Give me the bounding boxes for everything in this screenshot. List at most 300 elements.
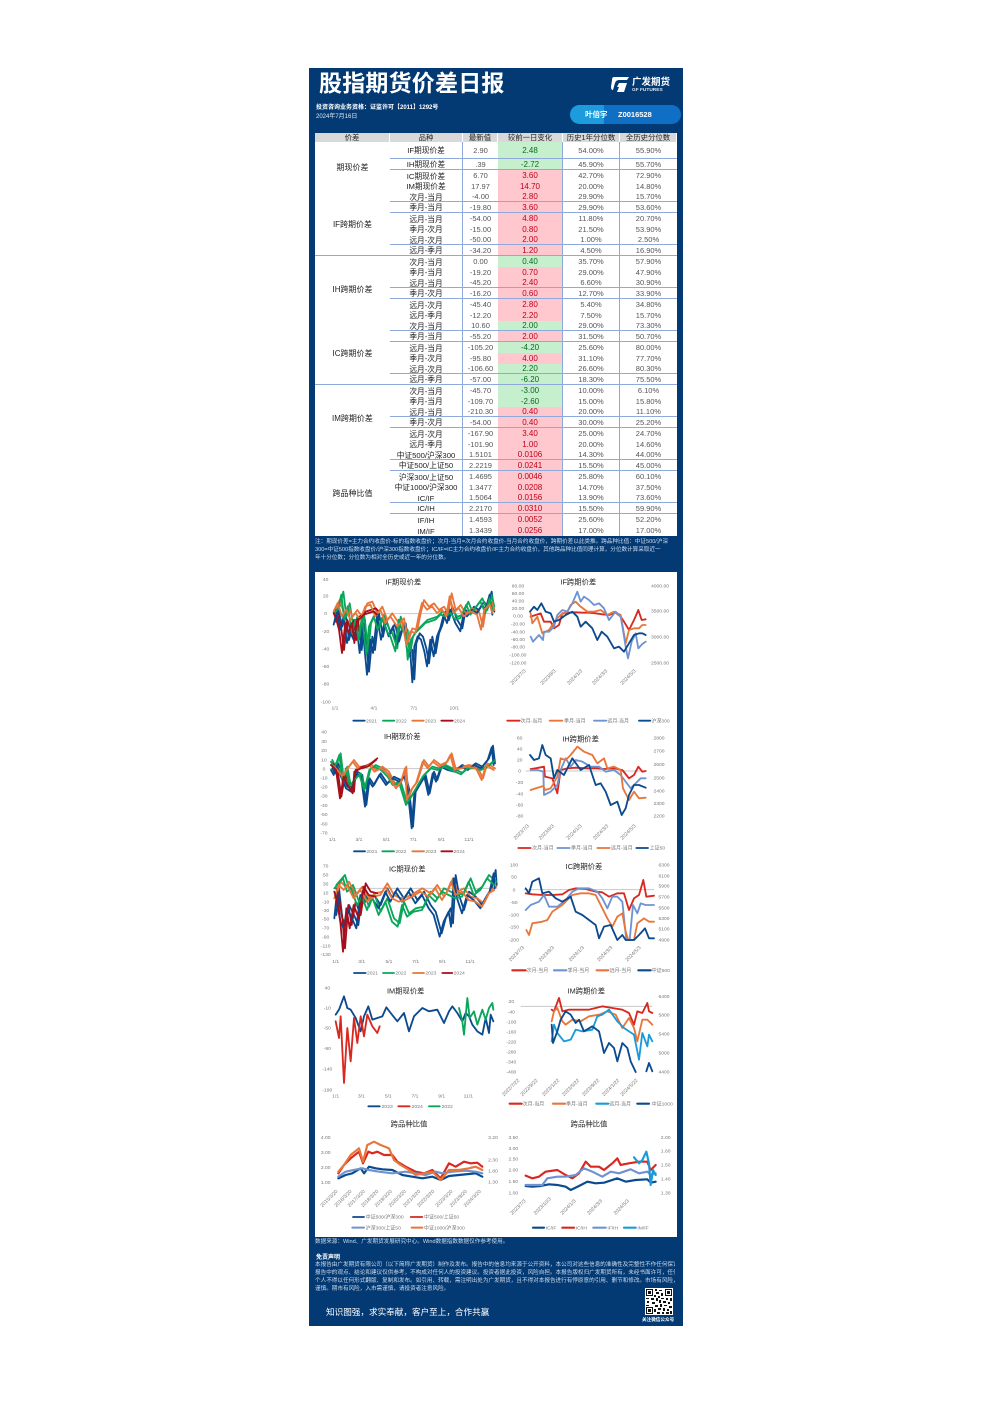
- chart: IH basis spread: IH期现价差: [384, 732, 421, 741]
- chart: index ratio: 跨品种比值: [391, 1120, 428, 1129]
- chart: IH calendar spread: 20: [517, 757, 523, 763]
- panel: spread data table: -55.20: [470, 332, 491, 341]
- chart: IH basis spread: 2024: [454, 849, 465, 855]
- chart: IM calendar spread: 次月-当月: [523, 1100, 544, 1107]
- chart: contract ratio: IM/IF: [637, 1225, 649, 1231]
- chart: index ratio: 3.00: [321, 1150, 331, 1156]
- chart: contract ratio: 1.40: [661, 1176, 671, 1182]
- chart: IH calendar spread: 2024/5/3: [620, 823, 638, 841]
- chart: index ratio: 2016/3/20: [334, 1189, 354, 1209]
- panel: spread data table: 2.90: [473, 146, 488, 155]
- chart: IH basis spread: -70: [320, 830, 328, 836]
- panel: spread data table: 16.90%: [636, 246, 661, 255]
- chart: IM basis spread: -90: [324, 1046, 331, 1052]
- panel: spread data table: IC跨期价差: [332, 349, 372, 358]
- chart: IC calendar spread: -50: [510, 900, 518, 906]
- chart: IM calendar spread: -160: [506, 1030, 517, 1036]
- panel: spread data table: 2.00: [522, 332, 538, 341]
- panel: spread data table: 33.90%: [636, 289, 661, 298]
- chart: index ratio: 中证500/沪深300: [366, 1214, 404, 1221]
- panel: spread data table: 0.0256: [518, 526, 542, 535]
- chart: IH calendar spread: 2024/3/3: [592, 823, 610, 841]
- panel: spread data table: 55.90%: [636, 146, 661, 155]
- chart: index ratio: 2.00: [321, 1165, 331, 1171]
- chart: contract ratio: IF/IH: [607, 1225, 619, 1231]
- panel: spread data table: 12.70%: [578, 289, 604, 298]
- panel: spread data table: 14.80%: [636, 182, 661, 191]
- panel: spread data table: .39: [475, 160, 486, 169]
- chart: IC basis spread: IC期现价差: [389, 864, 426, 873]
- chart: IH calendar spread: 次月-当月: [532, 845, 554, 852]
- chart: IC calendar spread: 5100: [658, 927, 670, 933]
- panel: spread data table: 44.00%: [636, 450, 661, 459]
- chart: IH calendar spread: 0: [518, 769, 521, 775]
- chart: IC calendar spread: 中证500: [652, 967, 670, 974]
- panel: spread data table: 次月-当月: [409, 322, 443, 331]
- panel: spread data table: 0.40: [522, 407, 538, 416]
- panel: spread data table: 37.50%: [636, 483, 661, 492]
- chart: index ratio: 1.30: [488, 1180, 498, 1186]
- panel: spread data table: 2.20: [522, 364, 538, 373]
- chart: IC basis spread: 1/1: [332, 959, 339, 965]
- chart: IM calendar spread: -40: [508, 1009, 515, 1015]
- panel: spread data table: 14.70%: [578, 483, 604, 492]
- chart: index ratio: 2023/9/20: [449, 1189, 469, 1209]
- panel: spread data table: 5.40%: [580, 300, 602, 309]
- chart: IC basis spread: 2024: [454, 971, 465, 977]
- panel: spread data table: 15.50%: [578, 461, 604, 470]
- chart: index ratio: 1.80: [488, 1169, 498, 1175]
- panel: spread data table: 0.0208: [518, 483, 542, 492]
- chart: IH basis spread: -10: [320, 775, 328, 781]
- panel: spread data table: 较前一日变化: [508, 133, 552, 142]
- chart: IM calendar spread: 5800: [658, 1012, 670, 1018]
- panel: spread data table: 21.50%: [578, 225, 604, 234]
- panel: spread data table: 远月-季月: [409, 375, 443, 384]
- icon: QR code: [645, 1288, 673, 1315]
- panel: spread data table: 11.80%: [579, 214, 603, 223]
- panel: spread data table: 17.00%: [578, 526, 604, 535]
- chart: IM calendar spread: 2024/1/22: [601, 1078, 621, 1098]
- chart: IC calendar spread: 远月-当月: [610, 967, 631, 974]
- panel: spread data table: 远月-次月: [409, 301, 443, 310]
- chart: contract ratio: 2.50: [508, 1157, 518, 1163]
- chart: IM basis spread: -50: [324, 1026, 331, 1032]
- panel: spread data table: 2.80: [522, 192, 538, 201]
- chart: IC calendar spread: 2023/7/3: [508, 945, 526, 963]
- chart: IM calendar spread: -280: [506, 1050, 517, 1056]
- panel: spread data table: 远月-次月: [409, 236, 443, 245]
- chart: IC calendar spread: 50: [511, 874, 517, 880]
- slogan: 知识图强，求实奉献，客户至上，合作共赢: [326, 1307, 489, 1317]
- panel: spread data table: -101.90: [468, 440, 493, 449]
- chart: IH calendar spread: 2600: [653, 762, 665, 768]
- report page background: [309, 68, 683, 1326]
- panel: spread data table: 2.40: [522, 278, 538, 287]
- title: 股指期货价差日报: [319, 70, 505, 96]
- panel: spread data table: 4.80: [522, 214, 538, 223]
- chart: IM basis spread: 7/1: [412, 1093, 419, 1099]
- panel: spread data table: 53.90%: [636, 225, 661, 234]
- panel: spread data table: 远月-当月: [409, 279, 443, 288]
- table footnote: 300=中证500指数收盘价/沪深300指数收盘价；IC/IF=IC主力合约收盘价/IF主力合约收盘价，其他跨品种比值同理计算，分位数计算采取近一: [315, 547, 661, 553]
- panel: spread data table: IH跨期价差: [332, 285, 372, 294]
- panel: spread data table: 2.50%: [638, 235, 659, 244]
- panel: spread data table: 3.60: [522, 203, 538, 212]
- panel: spread data table: -45.20: [470, 278, 491, 287]
- panel: spread data table: 0.0106: [518, 450, 542, 459]
- chart: IH basis spread: -20: [320, 785, 328, 791]
- panel: spread data table: 73.30%: [636, 321, 661, 330]
- chart: contract ratio: 2023/7/3: [510, 1198, 528, 1216]
- panel: spread data table: -12.20: [470, 311, 491, 320]
- panel: spread data table: 54.00%: [578, 146, 604, 155]
- panel: spread data table: IF/IH: [418, 516, 434, 525]
- panel: spread data table: IC/IF: [418, 494, 434, 503]
- qualification line: 投资咨询业务资格：证监许可【2011】1292号: [316, 105, 438, 111]
- panel: spread data table: 17.97: [471, 182, 490, 191]
- panel: spread data table: 4.00: [522, 354, 538, 363]
- panel: spread data table: 1.5101: [469, 450, 492, 459]
- chart: IC calendar spread: 100: [510, 863, 518, 869]
- panel: spread data table: 25.80%: [578, 472, 604, 481]
- chart: IH calendar spread: 60: [517, 735, 523, 741]
- panel: spread data table: [315, 133, 677, 536]
- disclaimer heading: 免责声明: [316, 1255, 340, 1261]
- chart: IF calendar spread: 3500.00: [651, 609, 669, 615]
- chart: IM calendar spread: 6400: [658, 994, 670, 1000]
- chart: IM calendar spread: 2023/1/22: [541, 1078, 561, 1098]
- chart: IF basis spread: 2023: [425, 718, 436, 724]
- chart: IH basis spread: 20: [321, 748, 327, 754]
- chart: contract ratio: 3.00: [508, 1146, 518, 1152]
- panel: spread data table: 18.30%: [578, 375, 604, 384]
- panel: spread data table: 59.90%: [636, 504, 661, 513]
- chart: IH calendar spread: IH跨期价差: [562, 735, 599, 744]
- chart: IC calendar spread: 4900: [658, 938, 670, 944]
- chart: contract ratio: 2024/3/3: [586, 1198, 604, 1216]
- panel: spread data table: 季月-当月: [409, 203, 443, 212]
- chart: IC calendar spread: 5900: [658, 883, 670, 889]
- panel: spread data table: 1.3439: [469, 526, 492, 535]
- panel: spread data table: -2.60: [521, 397, 539, 406]
- chart: IH calendar spread: -40: [516, 791, 523, 797]
- panel: spread data table: -34.20: [470, 246, 491, 255]
- logo: GF Futures: [611, 76, 671, 93]
- chart: index ratio: 4.00: [321, 1135, 331, 1141]
- chart: IF basis spread: 40: [323, 577, 329, 583]
- chart: IF basis spread: -80: [322, 681, 329, 687]
- logo: GF Futures: 广发期货: [632, 76, 671, 88]
- panel: spread data table: 53.60%: [636, 203, 661, 212]
- chart: IC calendar spread: 次月-当月: [527, 967, 548, 974]
- panel: spread data table: IH期现价差: [407, 160, 445, 169]
- panel: spread data table: 次月-当月: [409, 193, 443, 202]
- chart: IH basis spread: 2021: [366, 849, 378, 855]
- panel: spread data table: 3.60: [522, 171, 538, 180]
- panel: spread data table: 11.10%: [636, 407, 661, 416]
- panel: spread data table: 1.00%: [580, 235, 602, 244]
- chart: IH calendar spread: 2200: [653, 814, 665, 820]
- panel: spread data table: 31.50%: [578, 332, 604, 341]
- chart: IC basis spread: -30: [322, 908, 329, 914]
- panel: spread data table: 季月-次月: [409, 225, 443, 234]
- chart: IC basis spread: 10: [323, 890, 329, 896]
- panel: spread data table: 31.10%: [578, 354, 604, 363]
- panel: spread data table: 0.40: [522, 418, 538, 427]
- chart: contract ratio: 2024/1/3: [560, 1198, 578, 1216]
- chart: IH basis spread: 10: [321, 757, 327, 763]
- chart: IF calendar spread: 沪深300: [651, 717, 670, 724]
- chart: IF calendar spread: 2024/1/3: [566, 668, 584, 686]
- panel: spread data table: -45.70: [470, 386, 491, 395]
- panel: spread data table: -54.00: [470, 418, 491, 427]
- chart: index ratio: 1.00: [321, 1180, 331, 1186]
- chart: IH basis spread: 3/1: [356, 837, 363, 843]
- chart: IC basis spread: -70: [322, 926, 329, 932]
- chart: contract ratio: 1.00: [508, 1190, 518, 1196]
- chart: IF basis spread: -100: [321, 700, 331, 706]
- chart: IH calendar spread: [513, 735, 665, 852]
- chart: IF calendar spread: -80.00: [511, 645, 525, 651]
- panel: spread data table: 29.00%: [578, 321, 604, 330]
- panel: spread data table: 17.00%: [636, 526, 661, 535]
- chart: IC basis spread: -90: [322, 934, 329, 940]
- chart: contract ratio: 3.50: [508, 1135, 518, 1141]
- chart: IF calendar spread: 20.00: [512, 606, 524, 612]
- chart: IM calendar spread: -100: [506, 1020, 517, 1026]
- panel: spread data table: 29.00%: [578, 268, 604, 277]
- chart: IC basis spread: 30: [323, 881, 329, 887]
- chart: IF calendar spread: 60.00: [512, 591, 524, 597]
- chart: IC basis spread: 5/1: [386, 959, 393, 965]
- chart: IC basis spread: 2022: [395, 971, 407, 977]
- panel: spread data table: 季月-当月: [409, 332, 443, 341]
- panel: spread data table: 中证1000/沪深300: [395, 483, 457, 492]
- chart: index ratio: 2015/3/20: [320, 1189, 340, 1209]
- panel: spread data table: 远月-次月: [409, 365, 443, 374]
- chart: IM calendar spread: IM跨期价差: [568, 987, 605, 996]
- chart: IF basis spread: -60: [322, 664, 329, 670]
- chart: IH basis spread: 7/1: [410, 837, 417, 843]
- panel: spread data table: -95.80: [470, 354, 491, 363]
- panel: spread data table: IC/IH: [417, 504, 435, 513]
- chart: index ratio: 2019/3/20: [374, 1189, 394, 1209]
- panel: spread data table: 0.60: [522, 289, 538, 298]
- chart: IC calendar spread: -200: [509, 938, 519, 944]
- panel: spread data table: 品种: [419, 133, 433, 142]
- chart: IC basis spread: 11/1: [465, 959, 475, 965]
- chart: IF basis spread: 2021: [366, 718, 377, 724]
- panel: spread data table: 1.4593: [469, 515, 492, 524]
- chart: IM calendar spread: 2022/9/22: [520, 1078, 540, 1098]
- chart: index ratio: 2020/3/20: [388, 1189, 408, 1209]
- chart: index ratio: 沪深300/上证50: [366, 1224, 401, 1231]
- chart: IH calendar spread: 季月-当月: [571, 845, 593, 852]
- panel: spread data table: 73.60%: [636, 493, 661, 502]
- panel: spread data table: -4.20: [521, 343, 539, 352]
- panel: spread data table: 远月-当月: [409, 215, 443, 224]
- chart: IC calendar spread: 5500: [658, 905, 670, 911]
- panel: spread data table: 3.40: [522, 429, 538, 438]
- panel: spread data table: 13.90%: [578, 493, 604, 502]
- panel: spread data table: 4.50%: [580, 246, 602, 255]
- panel: spread data table: 25.00%: [578, 429, 604, 438]
- chart: contract ratio: 1.50: [661, 1162, 671, 1168]
- chart: IM calendar spread: 季月-当月: [566, 1100, 588, 1107]
- chart: index ratio: 2018/3/20: [360, 1189, 380, 1209]
- chart: IM calendar spread: 4400: [658, 1070, 670, 1076]
- panel: spread data table: 10.60: [471, 321, 490, 330]
- panel: spread data table: 30.90%: [636, 278, 661, 287]
- chart: IH calendar spread: -20: [516, 780, 523, 786]
- chart: IM calendar spread: 2023/9/22: [581, 1078, 601, 1098]
- panel: spread data table: 55.70%: [636, 160, 661, 169]
- chart: IH calendar spread: 2300: [653, 801, 665, 807]
- chart: IF basis spread: 20: [323, 594, 329, 600]
- chart: IM basis spread: [322, 986, 493, 1110]
- panel: spread data table: -109.70: [468, 397, 493, 406]
- chart: IF calendar spread: 2023/9/3: [540, 668, 558, 686]
- chart: IC basis spread: 70: [323, 864, 329, 870]
- chart: IC basis spread: 7/1: [412, 959, 419, 965]
- chart: index ratio: 3.20: [488, 1135, 498, 1141]
- panel: spread data table: 6.60%: [580, 278, 602, 287]
- panel: spread data table: 跨品种比值: [332, 489, 372, 498]
- panel: spread data table: -2.72: [521, 160, 539, 169]
- chart: IM calendar spread: 5400: [658, 1031, 670, 1037]
- chart: IM basis spread: 1/1: [332, 1093, 339, 1099]
- panel: spread data table: IM/IF: [417, 527, 435, 536]
- panel: spread data table: 2.80: [522, 300, 538, 309]
- panel: spread data table: 14.70: [520, 182, 540, 191]
- panel: spread data table: 1.20: [522, 246, 538, 255]
- chart: IC calendar spread: 2024/1/3: [568, 945, 586, 963]
- panel: spread data table: 中证500/沪深300: [397, 451, 455, 460]
- panel: spread data table: 0.0310: [518, 504, 542, 513]
- chart: IH calendar spread: 2400: [653, 788, 665, 794]
- chart: IM calendar spread: -220: [506, 1040, 517, 1046]
- chart: IM basis spread: 2024: [412, 1104, 423, 1110]
- chart: IF calendar spread: 4000.00: [651, 583, 669, 589]
- chart: IH basis spread: -50: [320, 812, 328, 818]
- panel: spread data table: 45.90%: [578, 160, 604, 169]
- chart: IF basis spread: 7/1: [411, 705, 418, 711]
- panel: spread data table: 0.80: [522, 225, 538, 234]
- panel: spread data table: 25.60%: [578, 343, 604, 352]
- chart: IH calendar spread: 2700: [653, 749, 665, 755]
- panel: spread data table: 0.0046: [518, 472, 542, 481]
- panel: spread data table: -6.20: [521, 375, 539, 384]
- chart: IC basis spread: -10: [322, 899, 329, 905]
- chart: IH basis spread: -40: [320, 803, 328, 809]
- chart: IH basis spread: 2022: [395, 849, 407, 855]
- panel: spread data table: IF期现价差: [407, 146, 445, 155]
- panel: spread data table: 72.90%: [636, 171, 661, 180]
- logo: GF Futures: GF FUTURES: [632, 87, 663, 93]
- data source note: 数据来源：Wind、广发期货发展研究中心。Wind数据指数数据仅作参考使用。: [315, 1239, 508, 1245]
- chart: IM basis spread: 9/1: [438, 1093, 445, 1099]
- chart: IF calendar spread: 2023/7/3: [510, 668, 528, 686]
- chart: IF basis spread: IF期现价差: [385, 577, 421, 586]
- panel: spread data table: 34.80%: [636, 300, 661, 309]
- panel: spread data table: IF跨期价差: [333, 220, 372, 229]
- panel: spread data table: 0.0156: [518, 493, 542, 502]
- panel: spread data table: -3.00: [521, 386, 539, 395]
- panel: spread data table: -19.80: [470, 203, 491, 212]
- chart: IM basis spread: 2023: [382, 1104, 393, 1110]
- chart: IH calendar spread: 2023/7/3: [513, 823, 531, 841]
- panel: spread data table: 季月-次月: [409, 418, 443, 427]
- analyst pill: 叶倍宇: [585, 110, 608, 119]
- chart: IF basis spread: -40: [322, 646, 329, 652]
- QR caption: 关注微信公众号: [642, 1317, 674, 1322]
- chart: IF calendar spread: -20.00: [511, 622, 525, 628]
- panel: spread data table: 0.70: [522, 268, 538, 277]
- chart: IM basis spread: 40: [325, 986, 330, 992]
- panel: spread data table: 25.20%: [636, 418, 661, 427]
- panel: spread data table: 75.50%: [636, 375, 661, 384]
- panel: spread data table: -210.30: [468, 407, 493, 416]
- chart: IF calendar spread: 远月-当月: [607, 717, 629, 724]
- chart: IH basis spread: [320, 730, 495, 855]
- panel: spread data table: 14.60%: [636, 440, 661, 449]
- chart: contract ratio: IC/IH: [576, 1225, 587, 1231]
- chart: IC calendar spread: 0: [513, 887, 516, 893]
- chart: IM calendar spread: 2022/7/22: [501, 1078, 521, 1098]
- chart: IF calendar spread: -60.00: [511, 637, 525, 643]
- panel: spread data table: 季月-次月: [409, 289, 443, 298]
- chart: IH basis spread: 2023: [425, 849, 437, 855]
- chart: IF calendar spread: 80.00: [512, 583, 524, 589]
- chart: IF basis spread: 2024: [454, 718, 465, 724]
- chart: IF calendar spread: 2024/3/3: [591, 668, 609, 686]
- table footnote: 注：期现价差=主力合约收盘价-标的指数收盘价；次月-当月=次月合约收盘价-当月合约收盘价，跨期价差以此类推。跨品种比值：中证500/沪深: [315, 539, 668, 545]
- chart: contract ratio: IC/IF: [546, 1225, 556, 1231]
- chart: index ratio: 中证500/上证50: [424, 1214, 459, 1221]
- chart: IM calendar spread: 5000: [658, 1051, 670, 1057]
- panel: spread data table: 2.48: [522, 146, 538, 155]
- panel: spread data table: 45.00%: [636, 461, 661, 470]
- panel: spread data table: 1.3477: [469, 483, 492, 492]
- chart: IC calendar spread: 6100: [658, 873, 670, 879]
- chart: IC calendar spread: 5700: [658, 894, 670, 900]
- panel: spread data table: 20.70%: [636, 214, 661, 223]
- chart: contract ratio: 2024/5/3: [613, 1198, 631, 1216]
- panel: spread data table: 77.70%: [636, 354, 661, 363]
- panel: spread data table: 47.90%: [636, 268, 661, 277]
- panel: spread data table: 57.90%: [636, 257, 661, 266]
- chart: IC basis spread: 9/1: [439, 959, 446, 965]
- chart: IC calendar spread: IC跨期价差: [566, 862, 602, 871]
- chart: IM basis spread: -190: [322, 1087, 333, 1093]
- panel: spread data table: 6.70: [473, 171, 488, 180]
- chart: IM calendar spread: 远月-当月: [609, 1100, 631, 1107]
- chart: index ratio: 2021/3/20: [402, 1189, 422, 1209]
- panel: spread data table: 15.00%: [578, 397, 604, 406]
- panel: spread data table: 0.00: [473, 257, 488, 266]
- chart: IC basis spread: 2023: [425, 971, 437, 977]
- panel: spread data table: 2.00: [522, 321, 538, 330]
- panel: spread data table: 远月-当月: [409, 408, 443, 417]
- chart: IC calendar spread: 5300: [658, 916, 670, 922]
- chart: IH basis spread: 9/1: [438, 837, 445, 843]
- chart: contract ratio: 2.00: [508, 1168, 518, 1174]
- chart: IF calendar spread: 2500.00: [651, 660, 669, 666]
- panel: spread data table: 50.70%: [636, 332, 661, 341]
- chart: contract ratio: 1.60: [661, 1148, 671, 1154]
- chart: IF calendar spread: -40.00: [511, 629, 525, 635]
